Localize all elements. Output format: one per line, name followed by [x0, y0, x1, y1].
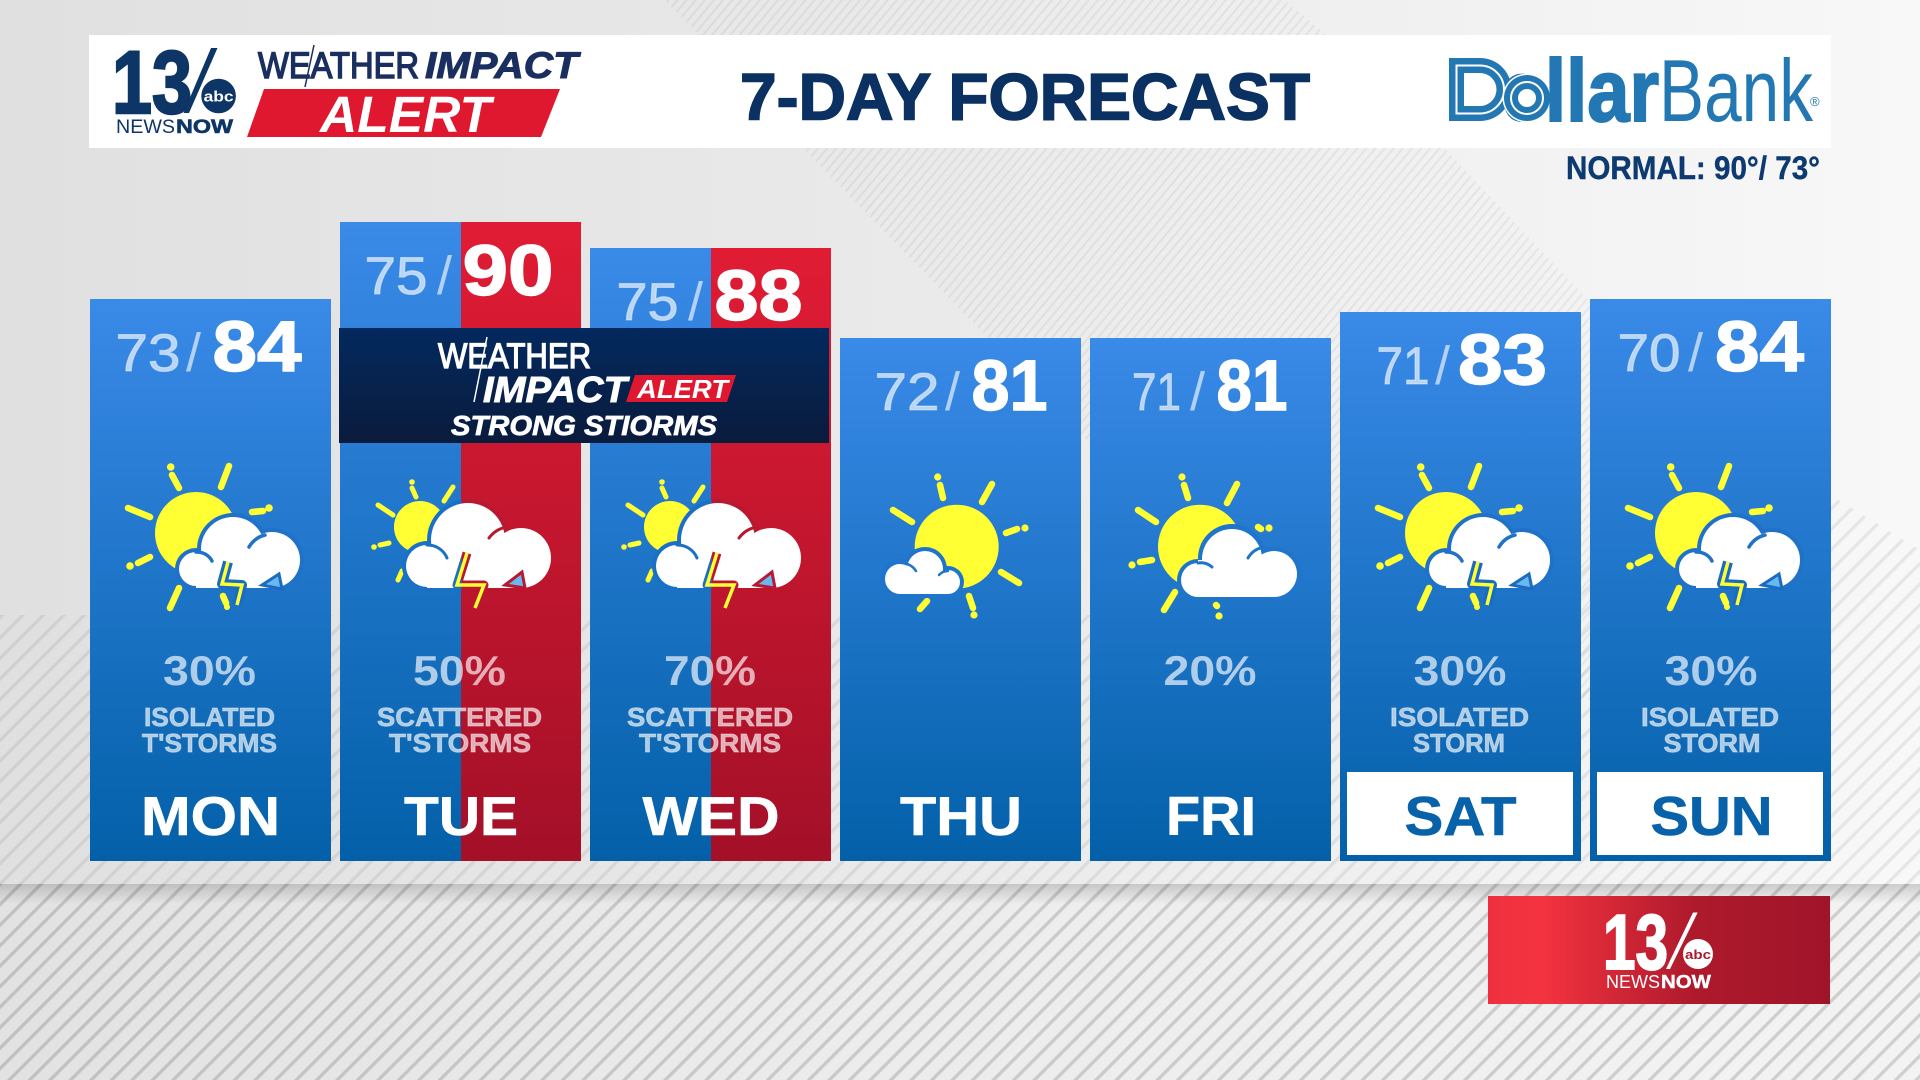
logo: 13 abc News Now: 13: [112, 32, 192, 132]
panel: Friday: [1090, 338, 1331, 861]
temperatures Sunday: /: [1688, 323, 1703, 383]
condition Saturday: [1390, 702, 1529, 758]
panel: Saturday: [1340, 312, 1581, 861]
temperatures Saturday: /: [1435, 336, 1450, 396]
logo: Dollar Bank: Do: [1449, 41, 1544, 140]
day label Wednesday: WED: [642, 785, 780, 847]
temperatures Thursday: /: [945, 362, 960, 422]
day label Friday: FRI: [1166, 785, 1256, 847]
callout: strong storms banner: ALERT: [636, 374, 730, 404]
title: 7-DAY FORECAST: [740, 60, 1310, 134]
condition Monday: T'STORMS: [142, 728, 277, 758]
callout: strong storms banner: [339, 328, 829, 443]
condition Saturday: ISOLATED: [1390, 702, 1529, 732]
temperatures Saturday: 83: [1458, 321, 1547, 400]
panel: Monday: [90, 299, 331, 861]
temperatures Sunday: [1618, 308, 1805, 387]
icon: sun with storm clouds Saturday: [1376, 463, 1554, 610]
icon: sun with storm clouds Tuesday: [371, 479, 551, 608]
icon: sun with small cloud Thursday: [881, 473, 1029, 619]
temperatures Wednesday: 88: [714, 257, 802, 336]
day label box Saturday: [1347, 772, 1573, 855]
temperatures Friday: 81: [1216, 347, 1288, 426]
condition Monday: [142, 702, 277, 758]
logo: 13 abc News Now red bug: 13: [1603, 898, 1668, 986]
logo: 13 abc News Now: abc: [204, 88, 234, 106]
condition Tuesday: T'STORMS: [389, 728, 531, 758]
temperatures Monday: 84: [212, 308, 302, 387]
icon: sun with storm clouds Wednesday: [621, 479, 801, 608]
normal temperatures: NORMAL: 90°/ 73°: [1566, 150, 1820, 186]
condition Sunday: ISOLATED: [1641, 702, 1779, 732]
panel: Wednesday: [590, 248, 831, 861]
logo: 13 abc News Now red bug: abc: [1685, 947, 1711, 962]
day label Thursday: THU: [900, 785, 1022, 847]
condition Monday: ISOLATED: [144, 702, 275, 732]
temperatures Friday: [1132, 347, 1288, 426]
temperatures Sunday: 70: [1618, 324, 1680, 383]
condition Wednesday: [627, 702, 793, 758]
logo: Weather Impact Alert: WEATHER: [258, 45, 419, 86]
condition Sunday: STORM: [1664, 728, 1760, 758]
temperatures Friday: /: [1190, 362, 1205, 422]
background stripes diagonal band: [803, 148, 1640, 700]
temperatures Saturday: 71: [1376, 337, 1430, 396]
panel: Tuesday: [340, 222, 581, 861]
temperatures Monday: 73: [116, 324, 180, 383]
day label box Sunday: SUN: [1650, 785, 1772, 847]
background stripes lower: [0, 495, 1920, 884]
precipitation chance Friday: 20%: [1164, 647, 1256, 694]
condition Wednesday: SCATTERED: [627, 702, 793, 732]
background stripes top: [664, 0, 1326, 35]
temperatures Monday: [116, 308, 302, 387]
logo: Dollar Bank: ®: [1810, 94, 1820, 109]
panel: Sunday: [1590, 299, 1831, 861]
precipitation chance Monday: 30%: [163, 647, 256, 694]
condition Wednesday: T'STORMS: [639, 728, 781, 758]
temperatures Wednesday: 75: [616, 273, 678, 332]
logo: 13 abc News Now: NOW: [176, 116, 234, 138]
floor: [0, 884, 1920, 1080]
temperatures Thursday: 81: [972, 347, 1048, 426]
logo: 13 abc News Now red bug: NEWS: [1606, 972, 1660, 992]
temperatures Tuesday: [364, 232, 554, 311]
temperatures Tuesday: 75: [364, 247, 428, 306]
callout: strong storms banner: IMPACT: [483, 369, 630, 410]
day label Monday: MON: [141, 785, 280, 847]
logo: Weather Impact Alert: [247, 45, 582, 143]
condition Tuesday: [377, 702, 542, 758]
callout: strong storms banner: WEATHER: [438, 337, 591, 376]
day label box Saturday: SAT: [1404, 785, 1516, 847]
icon: sun with large cloud Friday: [1128, 473, 1301, 620]
temperatures Monday: /: [186, 323, 201, 383]
temperatures Tuesday: /: [437, 246, 452, 306]
header bar: [89, 35, 1831, 148]
temperatures Thursday: [874, 347, 1048, 426]
temperatures Thursday: 72: [874, 363, 940, 422]
logo: 13 abc News Now red bug: NOW: [1661, 972, 1711, 992]
logo: 13 abc News Now red bug: [1488, 896, 1830, 1004]
logo: 13 abc News Now: NEWS: [116, 116, 175, 138]
temperatures Wednesday: [616, 257, 802, 336]
day label box Sunday: [1597, 772, 1823, 855]
logo: Weather Impact Alert: IMPACT: [425, 45, 582, 86]
precipitation chance Tuesday: 50%: [413, 647, 506, 694]
condition Saturday: STORM: [1413, 728, 1505, 758]
condition Sunday: [1641, 702, 1779, 758]
temperatures Wednesday: /: [688, 272, 703, 332]
temperatures Tuesday: 90: [462, 232, 554, 311]
logo: Dollar Bank: [1449, 41, 1820, 140]
logo: Dollar Bank: Bank: [1659, 41, 1814, 140]
panel: Thursday: [840, 338, 1081, 861]
icon: sun with storm clouds Sunday: [1626, 463, 1804, 610]
temperatures Saturday: [1376, 321, 1547, 400]
condition Tuesday: SCATTERED: [377, 702, 542, 732]
temperatures Friday: 71: [1132, 363, 1181, 422]
logo: Weather Impact Alert: ALERT: [318, 86, 495, 143]
day label Tuesday: TUE: [404, 785, 518, 847]
logo: Dollar Bank: llar: [1545, 41, 1659, 140]
precipitation chance Sunday: 30%: [1664, 647, 1758, 694]
precipitation chance Wednesday: 70%: [664, 647, 756, 694]
callout: strong storms banner: STRONG STIORMS: [451, 410, 717, 441]
precipitation chance Saturday: 30%: [1414, 647, 1506, 694]
temperatures Sunday: 84: [1715, 308, 1805, 387]
icon: sun with storm clouds Monday: [126, 463, 304, 610]
